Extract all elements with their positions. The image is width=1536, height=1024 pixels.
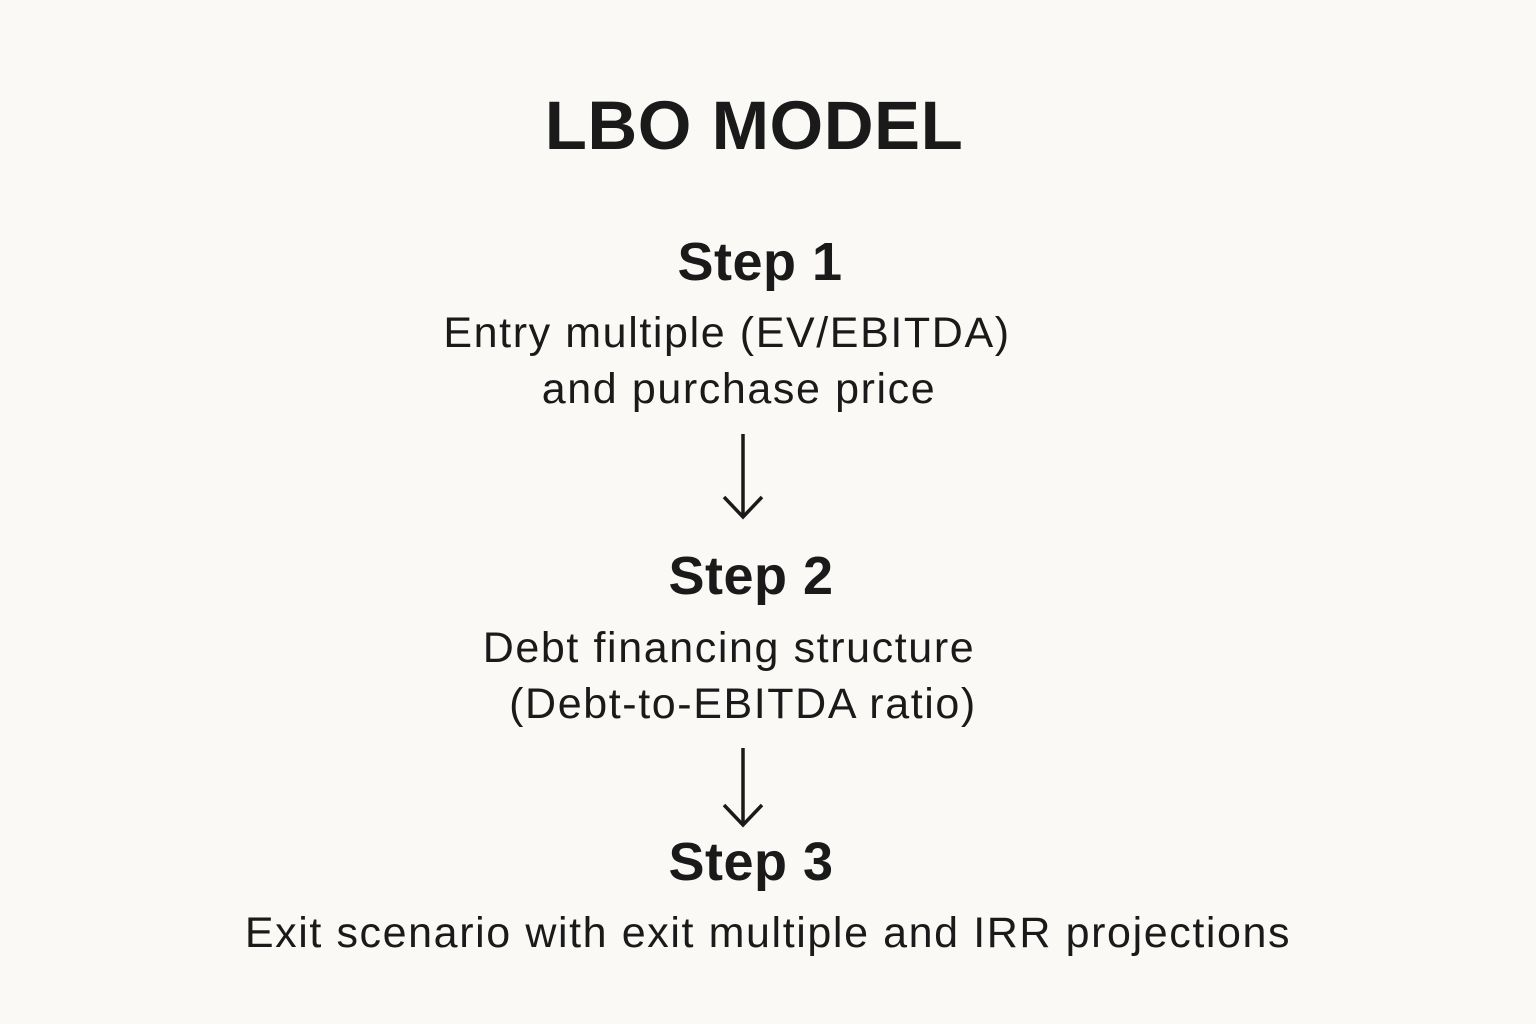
step 1 text: and purchase price: [542, 365, 936, 413]
arrow 2: [722, 748, 764, 828]
step 2 text: (Debt-to-EBITDA ratio): [509, 680, 977, 728]
step 3 heading: Step 3: [668, 832, 834, 892]
title: LBO MODEL: [545, 87, 963, 164]
step 2 text: Debt financing structure: [483, 624, 975, 672]
step 1 text: Entry multiple (EV/EBITDA): [443, 309, 1011, 357]
step 1 heading: Step 1: [677, 232, 843, 292]
arrow 1: [722, 434, 764, 520]
step 3 text: Exit scenario with exit multiple and IRR projections: [245, 909, 1291, 957]
step 2 heading: Step 2: [668, 546, 834, 606]
step 1 text: [443, 309, 1011, 413]
step 2 text: [483, 624, 977, 728]
